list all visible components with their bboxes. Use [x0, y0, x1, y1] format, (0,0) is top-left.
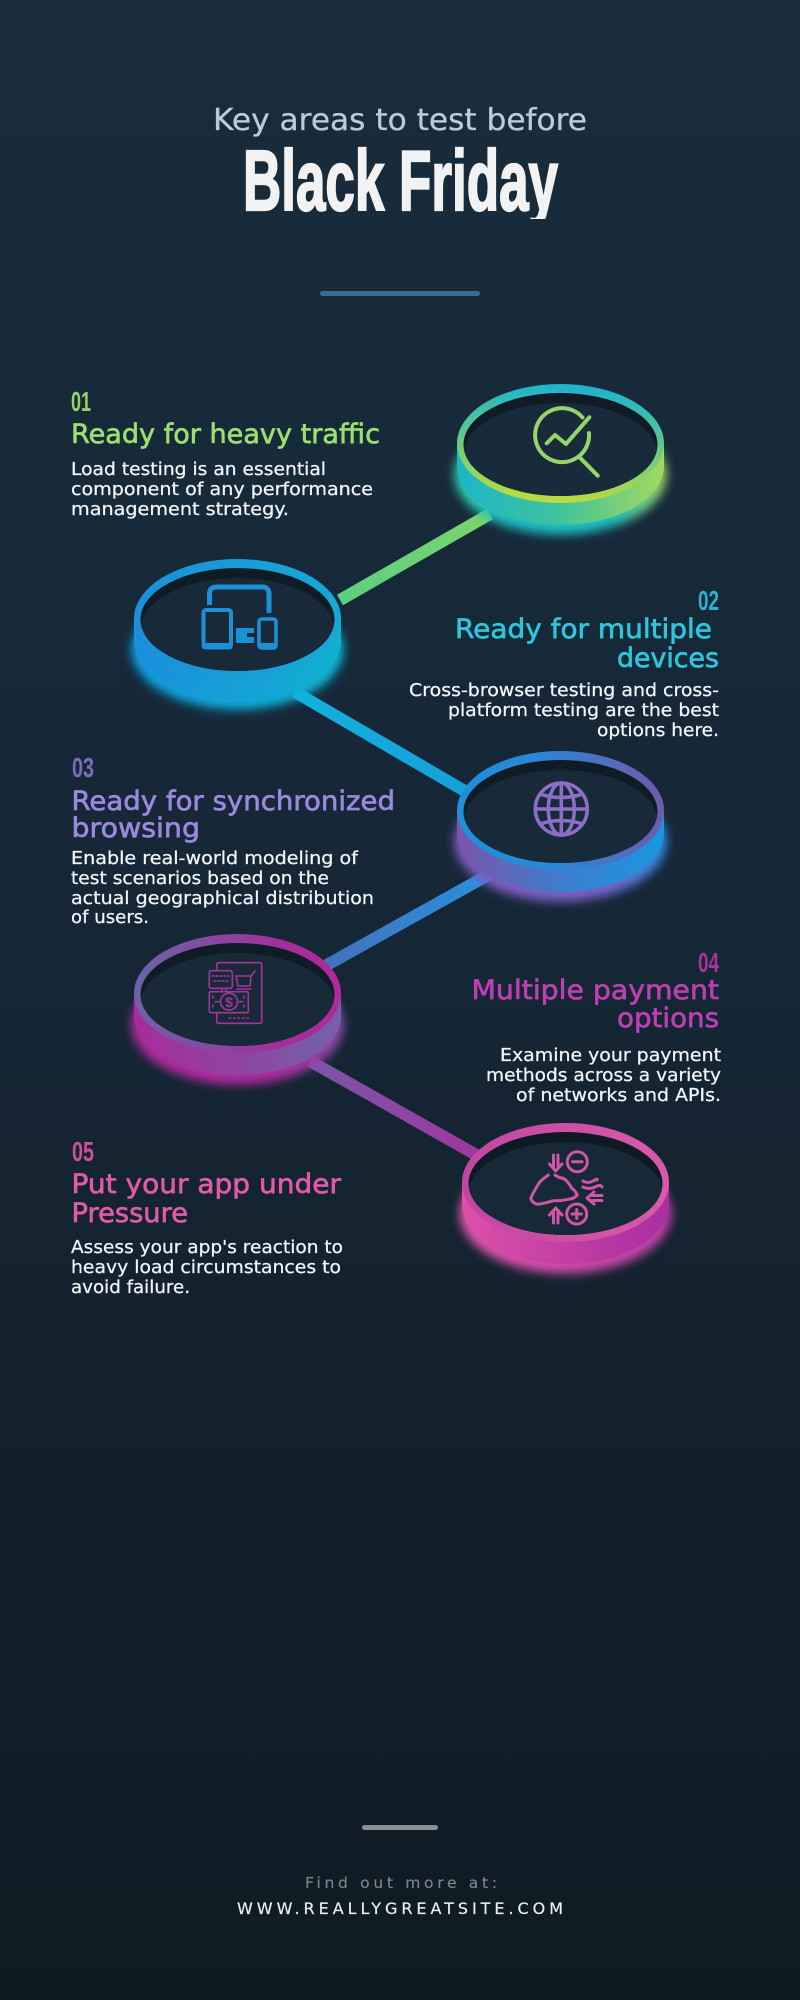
disc 4 body: [132, 934, 344, 1084]
icon: globe: [535, 783, 587, 835]
disc 3: synchronized browsing: [454, 751, 666, 902]
panel: 01 heavy traffic: [71, 386, 380, 520]
number 01: 01: [71, 386, 91, 417]
number 02: 02: [698, 585, 719, 616]
body 04: methods across a variety: [486, 1065, 721, 1086]
icon: dollar sign: $: [225, 994, 233, 1010]
disc 1 body: [454, 384, 666, 534]
connector 3 to 4: [325, 874, 490, 966]
title: Black Friday: [243, 134, 558, 229]
body 05: avoid failure.: [71, 1277, 190, 1298]
heading 01: Ready for heavy traffic: [71, 419, 380, 450]
icon: payment device: [209, 963, 262, 1023]
heading 02: Ready for multiple: [455, 614, 712, 645]
body 04: [486, 1045, 721, 1106]
header divider: [320, 291, 480, 296]
body 05: [71, 1237, 343, 1298]
disc 3 body: [454, 751, 666, 902]
panel: 04 payment options: [472, 947, 721, 1106]
number 05: 05: [72, 1136, 94, 1167]
body 01: Load testing is an essential: [71, 459, 326, 480]
heading 05: Pressure: [72, 1198, 188, 1229]
disc 4: payment options: [132, 934, 344, 1084]
icon: magnifier with trend line: [535, 408, 598, 476]
panel: 05 pressure: [71, 1136, 343, 1298]
header: [213, 103, 587, 296]
disc 5: pressure: [460, 1123, 672, 1274]
body 03: Enable real-world modeling of: [71, 848, 359, 869]
icon: cloud under pressure: [531, 1152, 602, 1224]
panel: 02 multiple devices: [409, 585, 719, 741]
body 04: Examine your payment: [500, 1045, 721, 1066]
disc 2: multiple devices: [132, 559, 344, 710]
body 01: management strategy.: [71, 499, 289, 520]
disc 1: heavy traffic: [454, 384, 666, 534]
body 03: actual geographical distribution: [71, 888, 374, 909]
body 03: [71, 848, 374, 928]
body 02: [409, 680, 719, 741]
body 01: component of any performance: [71, 479, 373, 500]
heading 04: [472, 975, 719, 1034]
footer url: WWW.REALLYGREATSITE.COM: [237, 1899, 563, 1918]
footer divider: [362, 1825, 438, 1830]
connector 4 to 5: [310, 1061, 480, 1157]
number 03: 03: [72, 752, 94, 783]
heading 05: Put your app under: [72, 1169, 342, 1200]
heading 02: devices: [617, 643, 719, 674]
footer prompt: Find out more at:: [305, 1874, 497, 1892]
body 04: of networks and APIs.: [516, 1085, 721, 1106]
subtitle: Key areas to test before: [213, 103, 587, 138]
heading 04: options: [617, 1003, 719, 1034]
heading 04: Multiple payment: [472, 975, 719, 1006]
footer: [237, 1825, 563, 1918]
number 04: 04: [698, 947, 719, 978]
panel: 03 synchronized browsing: [71, 752, 395, 928]
heading 03: Ready for synchronized: [72, 786, 395, 817]
body 03: of users.: [71, 907, 149, 928]
body 01: [71, 459, 373, 520]
heading 02: [455, 614, 719, 674]
connector 2 to 3: [295, 692, 470, 794]
body 05: heavy load circumstances to: [71, 1257, 341, 1278]
disc 5 body: [460, 1123, 672, 1274]
heading 03: browsing: [72, 813, 200, 844]
body 02: platform testing are the best: [448, 700, 719, 721]
connector 1 to 2: [340, 514, 490, 600]
body 03: test scenarios based on the: [71, 868, 329, 889]
disc 2 body: [132, 559, 344, 710]
connector lines: [295, 514, 490, 1157]
heading 05: [72, 1169, 342, 1229]
heading 03: [72, 786, 395, 844]
body 02: options here.: [597, 720, 719, 741]
icon: devices: [202, 587, 277, 649]
body 05: Assess your app's reaction to: [71, 1237, 343, 1258]
body 02: Cross-browser testing and cross-: [409, 680, 719, 701]
